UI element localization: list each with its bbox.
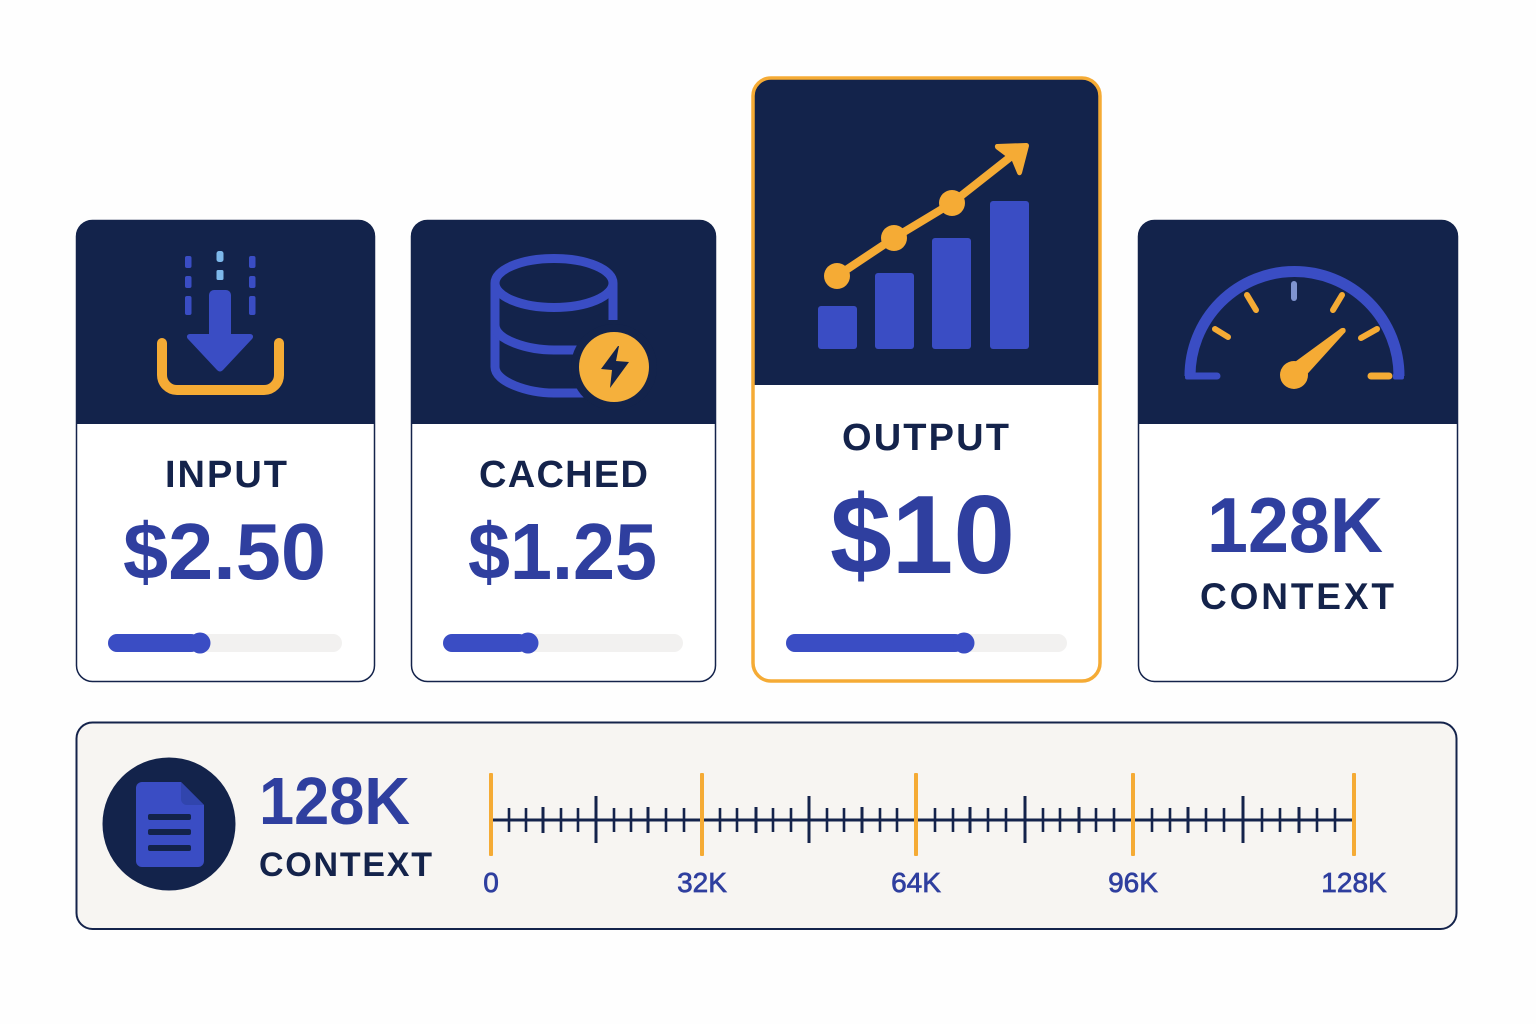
progress bar: input — [108, 632, 342, 654]
axis label: 64K: 64K — [891, 867, 941, 898]
price: output: $10 — [830, 473, 1015, 597]
label: context: CONTEXT — [1200, 576, 1394, 617]
panel: input card — [76, 220, 375, 682]
icon: database with lightning badge — [495, 258, 657, 410]
heading: output: OUTPUT — [842, 417, 1009, 459]
panel: context timeline — [76, 722, 1456, 929]
icon: rising bar chart with arrow — [818, 143, 1029, 349]
progress bar: output — [786, 632, 1067, 654]
heading: input: INPUT — [165, 454, 287, 496]
value: 128K context: 128K — [259, 764, 410, 839]
axis label: 32K: 32K — [677, 867, 727, 898]
panel: output card (highlighted) — [753, 78, 1100, 681]
axis label: 0: 0 — [483, 867, 499, 898]
panel: context card — [1138, 220, 1458, 682]
value: 128K: 128K — [1207, 481, 1383, 569]
axis label: 128K: 128K — [1321, 867, 1387, 898]
axis label: 96K: 96K — [1108, 867, 1158, 898]
icon: badge halo — [571, 324, 657, 410]
icon: document in circle — [102, 758, 236, 890]
price: cached: $1.25 — [468, 507, 657, 596]
chart: token ruler — [489, 773, 1356, 856]
price: input: $2.50 — [123, 507, 326, 596]
progress bar: cached — [443, 632, 683, 654]
panel: cached card — [411, 220, 716, 682]
icon: gauge — [1185, 271, 1404, 389]
heading: cached: CACHED — [479, 454, 648, 496]
icon: download into tray — [162, 251, 279, 390]
label: context: CONTEXT — [259, 846, 432, 884]
